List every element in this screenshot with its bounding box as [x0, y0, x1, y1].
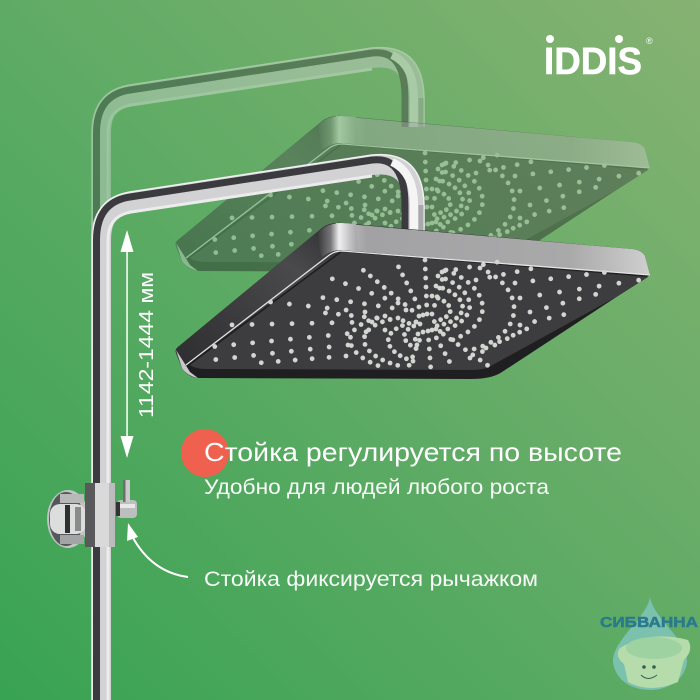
ghost shower rail (raised position) — [93, 48, 424, 593]
subheading: Удобно для людей любого роста — [204, 476, 549, 499]
watermark logo: Sibvanna — [600, 597, 699, 690]
watermark logo: Sibvanna: СИБВАННА — [600, 615, 699, 631]
height dimension arrow — [120, 230, 134, 458]
logo: IDDIS: IDDIS — [544, 41, 642, 83]
red accent circle — [181, 429, 229, 477]
heading: height adjustable: Стойка регулируется по высоте — [204, 437, 622, 467]
icon: wall mount and lever bracket — [47, 480, 137, 548]
ghost shower head (raised position) — [176, 116, 650, 272]
height label: 1142-1444 мм — [136, 272, 158, 418]
logo: IDDIS: ® — [646, 36, 653, 46]
shower head — [176, 223, 650, 379]
curved arrow to lever — [127, 523, 188, 577]
shower rail — [93, 155, 424, 700]
callout: lever text: Стойка фиксируется рычажком — [204, 568, 538, 591]
